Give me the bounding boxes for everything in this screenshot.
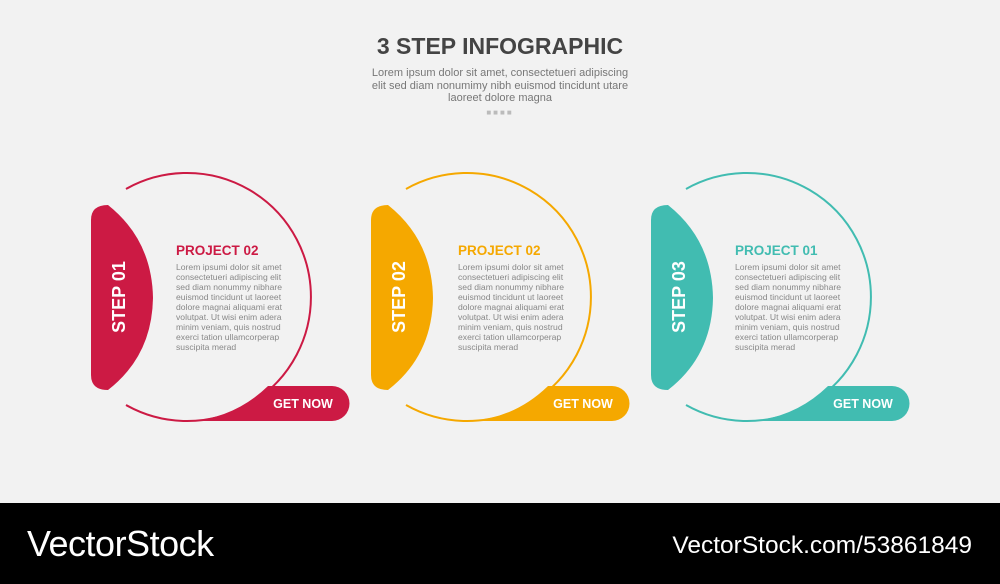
subtitle: Lorem ipsum dolor sit amet, consectetueri adipiscing bbox=[372, 67, 628, 79]
step 2: euismod tincidunt ut laoreet bbox=[458, 292, 564, 302]
step 1: STEP 01 bbox=[109, 261, 129, 333]
step 3: sed diam nonummy nibhare bbox=[735, 282, 841, 292]
step 2: volutpat. Ut wisi enim adera bbox=[458, 312, 564, 322]
dots: ■■■■ bbox=[486, 108, 514, 117]
step 1: GET NOW bbox=[273, 397, 333, 411]
step 1: sed diam nonummy nibhare bbox=[176, 282, 282, 292]
step 3: volutpat. Ut wisi enim adera bbox=[735, 312, 841, 322]
step 1 bbox=[91, 173, 350, 421]
step 2: minim veniam, quis nostrud bbox=[458, 322, 563, 332]
step 2: STEP 02 bbox=[389, 261, 409, 333]
step 2: dolore magnai aliquami erat bbox=[458, 302, 565, 312]
step 1: volutpat. Ut wisi enim adera bbox=[176, 312, 282, 322]
step 2: suscipita merad bbox=[458, 342, 518, 352]
step 3: suscipita merad bbox=[735, 342, 795, 352]
footer bbox=[0, 503, 1000, 584]
step 2 bbox=[371, 173, 630, 421]
step 3: exerci tation ullamcorperap bbox=[735, 332, 838, 342]
step 1: euismod tincidunt ut laoreet bbox=[176, 292, 282, 302]
step 3: PROJECT 01 bbox=[735, 243, 818, 258]
step 1: Lorem ipsumi dolor sit amet bbox=[176, 262, 282, 272]
subtitle: elit sed diam nonumimy nibh euismod tincidunt utare bbox=[372, 80, 628, 92]
step 2: PROJECT 02 bbox=[458, 243, 541, 258]
title: 3 STEP INFOGRAPHIC bbox=[377, 33, 623, 59]
step 3: consectetueri adipiscing elit bbox=[735, 272, 841, 282]
step 1: consectetueri adipiscing elit bbox=[176, 272, 282, 282]
step 3: GET NOW bbox=[833, 397, 893, 411]
step 3: Lorem ipsumi dolor sit amet bbox=[735, 262, 841, 272]
step 2: GET NOW bbox=[553, 397, 613, 411]
step 1: suscipita merad bbox=[176, 342, 236, 352]
step 2: consectetueri adipiscing elit bbox=[458, 272, 564, 282]
step 1: PROJECT 02 bbox=[176, 243, 259, 258]
step 1: dolore magnai aliquami erat bbox=[176, 302, 283, 312]
step 3: STEP 03 bbox=[669, 261, 689, 333]
step 3 bbox=[651, 173, 910, 421]
step 1: minim veniam, quis nostrud bbox=[176, 322, 281, 332]
subtitle: laoreet dolore magna bbox=[448, 92, 552, 104]
step 2: exerci tation ullamcorperap bbox=[458, 332, 561, 342]
step 1: exerci tation ullamcorperap bbox=[176, 332, 279, 342]
step 3: minim veniam, quis nostrud bbox=[735, 322, 840, 332]
step 3: euismod tincidunt ut laoreet bbox=[735, 292, 841, 302]
step 2: sed diam nonummy nibhare bbox=[458, 282, 564, 292]
subtitle bbox=[372, 67, 628, 104]
step 2: Lorem ipsumi dolor sit amet bbox=[458, 262, 564, 272]
step 3: dolore magnai aliquami erat bbox=[735, 302, 842, 312]
footer url: VectorStock.com/53861849 bbox=[672, 532, 972, 559]
footer logo: VectorStock bbox=[27, 523, 214, 564]
